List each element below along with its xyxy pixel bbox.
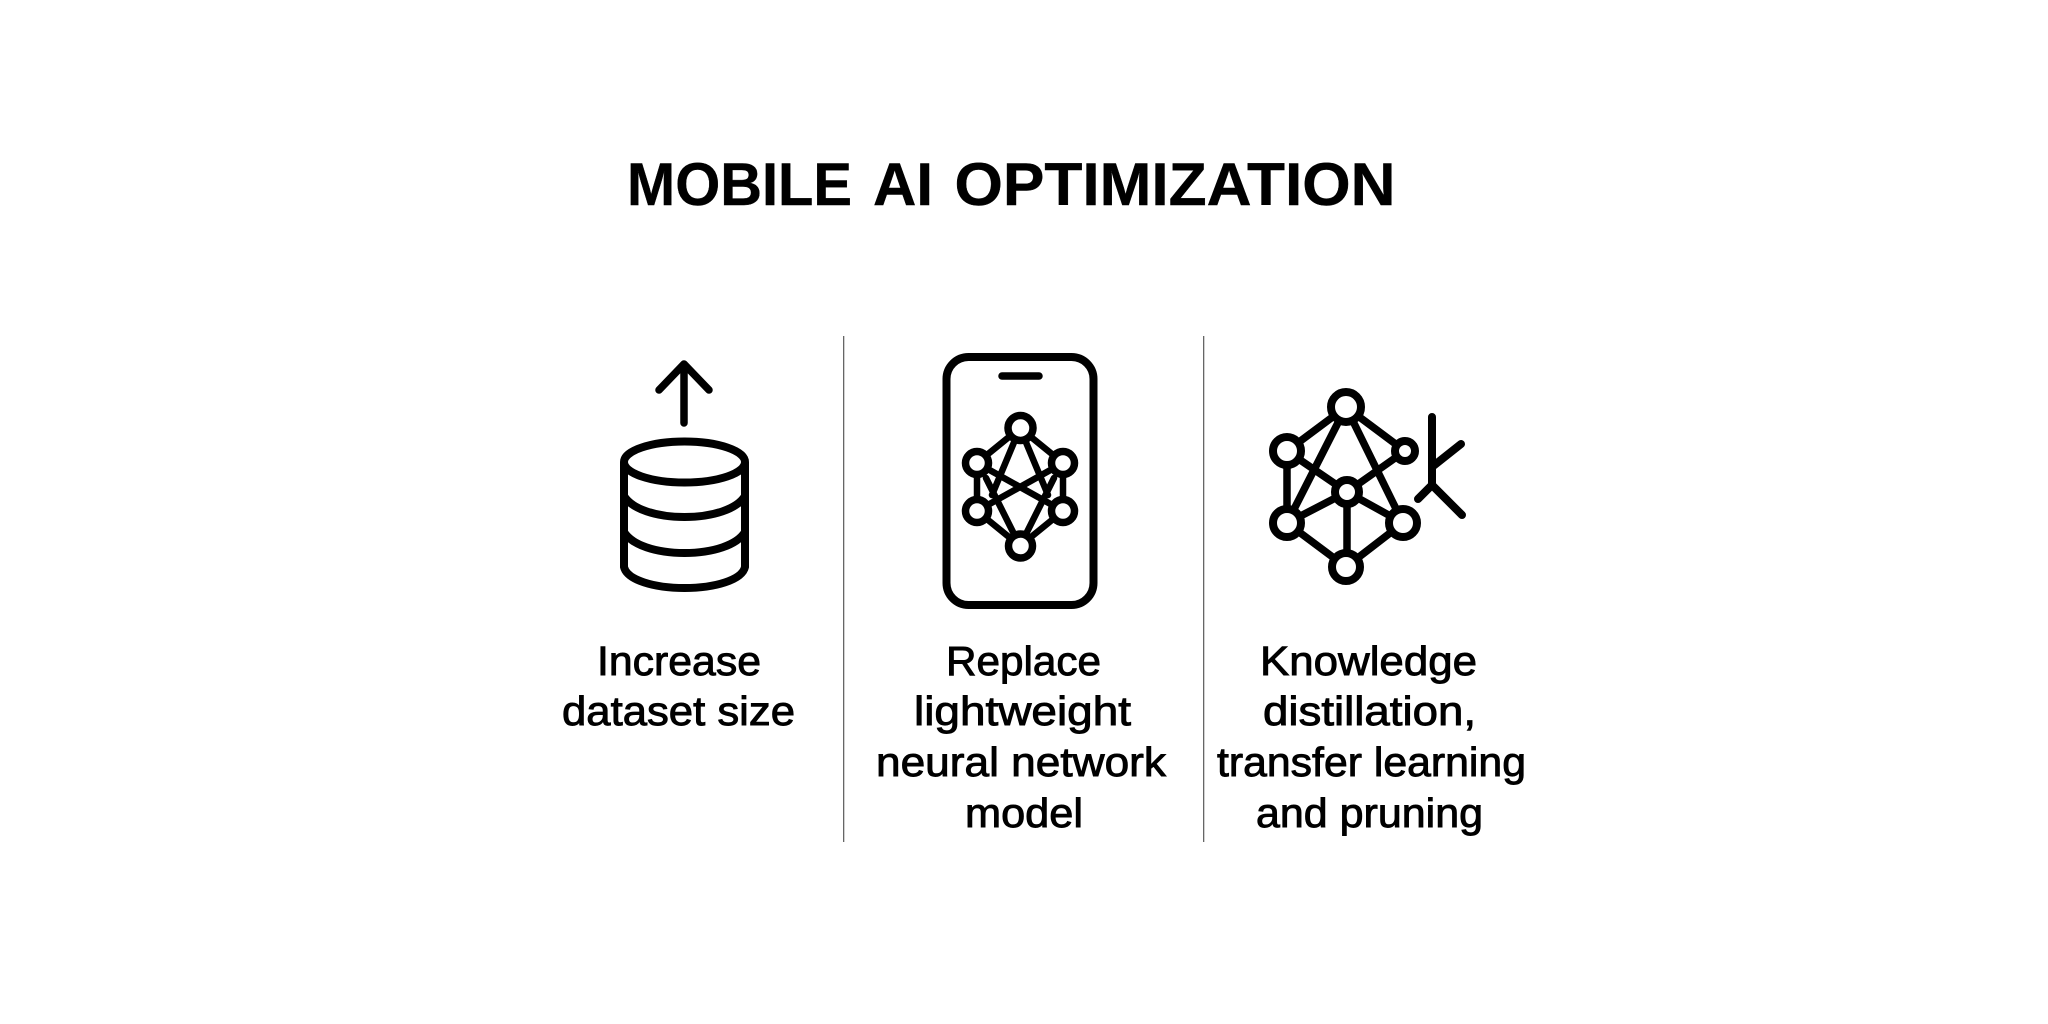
text: knowledge distillation, transfer learning and pruning: and pruning [1256,790,1483,836]
network nodes [1273,392,1417,581]
phone speaker [1002,372,1039,380]
icon: up arrow [659,364,709,423]
text: knowledge distillation, transfer learning and pruning: distillation, [1263,688,1476,734]
icon: network with branching symbol [1273,392,1462,581]
text: knowledge distillation, transfer learning and pruning: Knowledge [1260,638,1477,684]
network links [1287,407,1405,567]
branching symbol [1418,417,1462,515]
title: AI [873,151,933,218]
text: knowledge distillation, transfer learning and pruning: transfer learning [1217,739,1526,785]
title: OPTIMIZATION [954,151,1396,218]
text: increase dataset size: dataset size [562,688,795,734]
column 3: knowledge distillation, transfer learning and pruning [1217,392,1526,836]
divider 2 [1203,336,1204,842]
text: replace lightweight neural network model: Replace [946,638,1101,684]
network links [977,428,1063,546]
network nodes [966,416,1074,558]
title: MOBILE [627,151,852,218]
text: increase dataset size: Increase [597,638,761,684]
divider 1 [843,336,844,842]
column 2: replace lightweight neural network model [876,357,1167,836]
phone body [946,357,1094,605]
icon: database cylinder [624,442,745,588]
column 1: increase dataset size [562,364,795,734]
icon: database with up arrow [624,364,745,588]
text: replace lightweight neural network model: lightweight [914,688,1132,734]
text: replace lightweight neural network model: neural network [876,739,1167,785]
icon: phone with neural network [946,357,1094,605]
text: replace lightweight neural network model: model [965,790,1083,836]
